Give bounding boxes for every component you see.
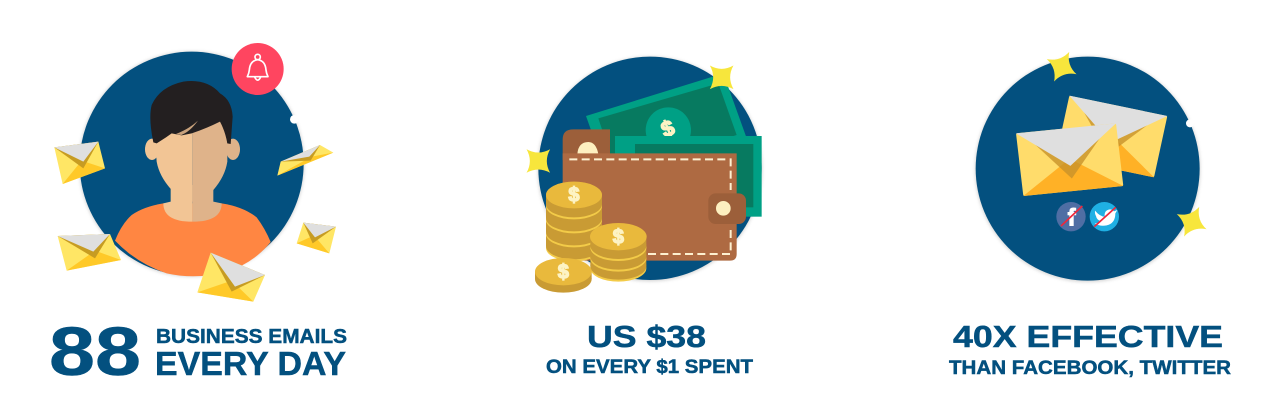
sparkle: top (698, 54, 745, 101)
stat: 88: 88 (49, 313, 141, 390)
sparkle: top (1039, 44, 1084, 89)
icon: notification bell (232, 43, 284, 95)
panel: return on spend (515, 54, 762, 378)
stat: US $38: US $38 (587, 319, 706, 354)
label: business emails: BUSINESS EMAILS (156, 326, 347, 348)
coin stack: small: $ (613, 226, 624, 248)
banknotes: $ (657, 115, 678, 142)
icon: facebook crossed out: f (1068, 205, 1077, 232)
envelope: left (54, 142, 105, 184)
white dot (1186, 119, 1194, 127)
envelope: bottom (197, 253, 265, 302)
sparkle: right (1169, 199, 1214, 244)
label: every day: EVERY DAY (155, 345, 346, 382)
coin stack: large (546, 182, 602, 261)
wallet (563, 129, 746, 261)
illustration: person with emails (54, 43, 336, 302)
envelope: back (1056, 96, 1167, 177)
circle background (79, 51, 304, 277)
panel: business emails (49, 43, 347, 390)
panel: effectiveness (949, 44, 1231, 379)
icon: facebook crossed out (1056, 202, 1086, 232)
stat: 40X effective: 40X EFFECTIVE (953, 319, 1223, 354)
white dot (290, 115, 299, 124)
circle background (975, 57, 1200, 282)
envelope: lower right (297, 223, 336, 253)
icon: twitter crossed out (1090, 202, 1119, 231)
illustration: wallet and coins (515, 54, 762, 293)
coin stack: large: $ (568, 185, 580, 207)
illustration: envelopes and social icons (975, 44, 1214, 282)
single coin (535, 258, 592, 293)
envelope: right tilted (277, 145, 333, 176)
banknotes (586, 73, 762, 217)
coin stack: small (590, 223, 647, 282)
envelope: lower left (58, 234, 121, 271)
label: on every $1 spent: ON EVERY $1 SPENT (546, 357, 753, 378)
label: than facebook, twitter: THAN FACEBOOK, TWITTER (949, 358, 1231, 379)
single coin: $ (558, 261, 569, 283)
person (115, 81, 271, 276)
circle background (538, 57, 762, 281)
envelope: front (1016, 123, 1123, 196)
sparkle: left (515, 137, 562, 185)
